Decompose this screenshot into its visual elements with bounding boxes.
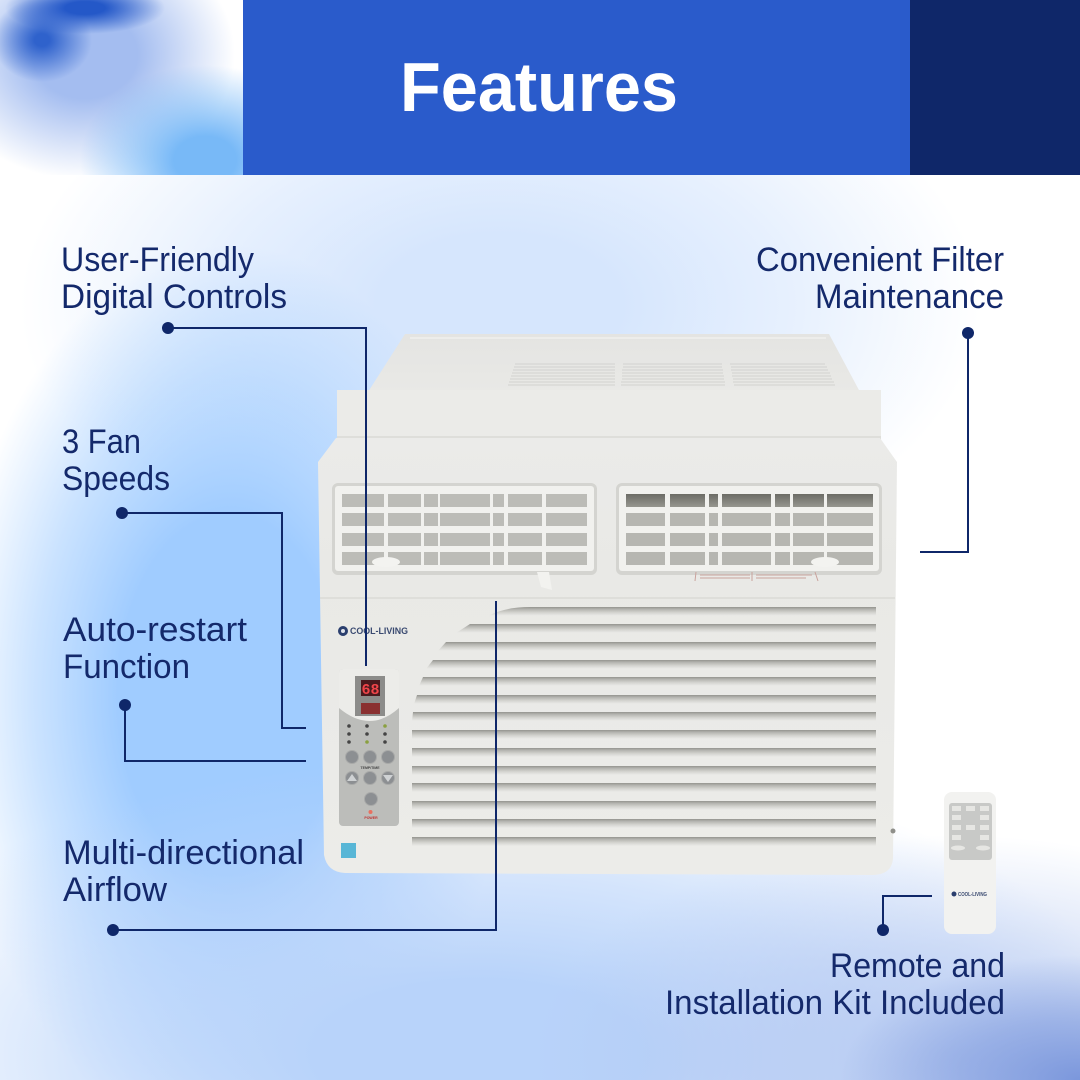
louver tab [537,572,552,590]
header left gradient block [0,0,243,175]
control panel [339,669,399,826]
callout: 3 Fan Speeds: 3 Fan [62,423,141,461]
top housing [368,334,860,392]
control panel: TEMP/TIME [360,766,380,770]
panel buttons [346,750,394,806]
callout: 3 Fan Speeds [62,423,306,728]
callout: User-Friendly Digital Controls [61,241,366,666]
digital display [355,676,385,716]
header center band [243,0,910,175]
product: window air conditioner [318,334,897,875]
warning label [695,572,818,581]
energy star badge [341,843,356,858]
side flange [337,390,881,440]
callout: Auto-restart Function [63,611,306,761]
callout: Multi-directional Airflow: Multi-directional [63,834,304,872]
digital display: 68 [362,682,380,699]
callout: Multi-directional Airflow [63,601,496,936]
callout: Remote and Installation Kit Included [665,896,1005,1022]
remote control [944,792,996,934]
callout: User-Friendly Digital Controls: Digital Controls [61,278,287,316]
callout: Convenient Filter Maintenance: Maintenance [815,278,1004,316]
callout: Convenient Filter Maintenance [756,241,1004,552]
callout: Auto-restart Function: Auto-restart [63,611,248,649]
front grille louvers [412,607,876,846]
control panel: POWER [364,816,378,820]
callout: 3 Fan Speeds: Speeds [62,460,170,498]
left air vent [332,483,597,575]
indicator lights [347,724,387,744]
callout: Remote and Installation Kit Included: Remote and [830,947,1005,985]
side screw [890,828,896,834]
main body [318,438,897,875]
callout: Multi-directional Airflow: Airflow [63,871,167,909]
callout: Remote and Installation Kit Included: Installation Kit Included [665,984,1005,1022]
header right band [910,0,1080,175]
callout: Auto-restart Function: Function [63,648,190,686]
top vents [508,364,835,385]
right air vent [616,483,882,575]
title: Features [400,48,678,126]
brand logo: COOL-LIVING [350,626,408,636]
callout: Convenient Filter Maintenance: Convenient Filter [756,241,1004,279]
remote control: COOL-LIVING [958,892,987,898]
callout: User-Friendly Digital Controls: User-Friendly [61,241,254,279]
